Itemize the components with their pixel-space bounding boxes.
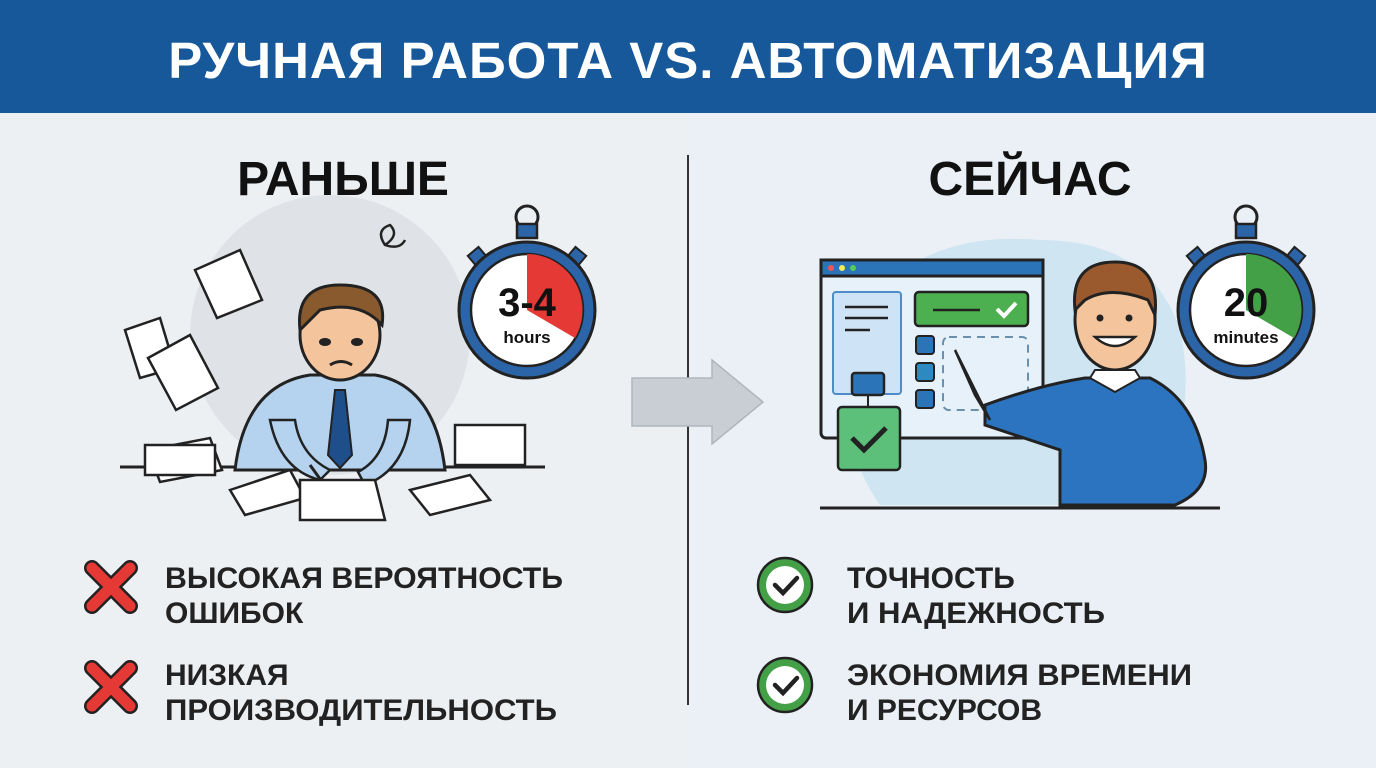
pro item 1 <box>758 558 1105 630</box>
illustration: stressed worker <box>120 195 545 520</box>
con item 2 <box>92 659 557 727</box>
stopwatch: 20 minutes: 20 <box>1224 281 1268 325</box>
head <box>300 290 380 380</box>
flying papers <box>125 250 525 515</box>
heading: before: РАНЬШЕ <box>237 153 449 206</box>
con item 1 <box>92 562 563 630</box>
person <box>985 378 1206 505</box>
app window <box>821 260 1043 438</box>
pro item 1: И НАДЕЖНОСТЬ <box>847 597 1105 630</box>
icon: red x <box>92 568 130 606</box>
stopwatch: 3-4 hours: 3-4 <box>498 281 557 325</box>
pro item 2 <box>758 658 1192 727</box>
arms <box>270 420 330 480</box>
stopwatch: 20 minutes <box>1178 206 1314 378</box>
body <box>235 375 445 470</box>
pro item 1: ТОЧНОСТЬ <box>847 562 1015 595</box>
stopwatch: 20 minutes: minutes <box>1213 328 1279 347</box>
stopwatch: 3-4 hours: hours <box>503 328 551 347</box>
header bar <box>0 0 1376 113</box>
paper on desk <box>300 480 385 520</box>
con item 2: НИЗКАЯ <box>165 659 289 692</box>
heading: now: СЕЙЧАС <box>928 151 1132 206</box>
con item 2: ПРОИЗВОДИТЕЛЬНОСТЬ <box>165 694 557 727</box>
pro item 2: ЭКОНОМИЯ ВРЕМЕНИ <box>847 659 1192 692</box>
con item 1: ОШИБОК <box>165 597 304 630</box>
stopwatch: 3-4 hours <box>459 206 595 378</box>
con item 1: ВЫСОКАЯ ВЕРОЯТНОСТЬ <box>165 562 563 595</box>
title: РУЧНАЯ РАБОТА VS. АВТОМАТИЗАЦИЯ <box>168 32 1208 89</box>
illustration: automation <box>820 239 1220 508</box>
arrow <box>632 360 763 444</box>
pro item 2: И РЕСУРСОВ <box>847 694 1042 727</box>
